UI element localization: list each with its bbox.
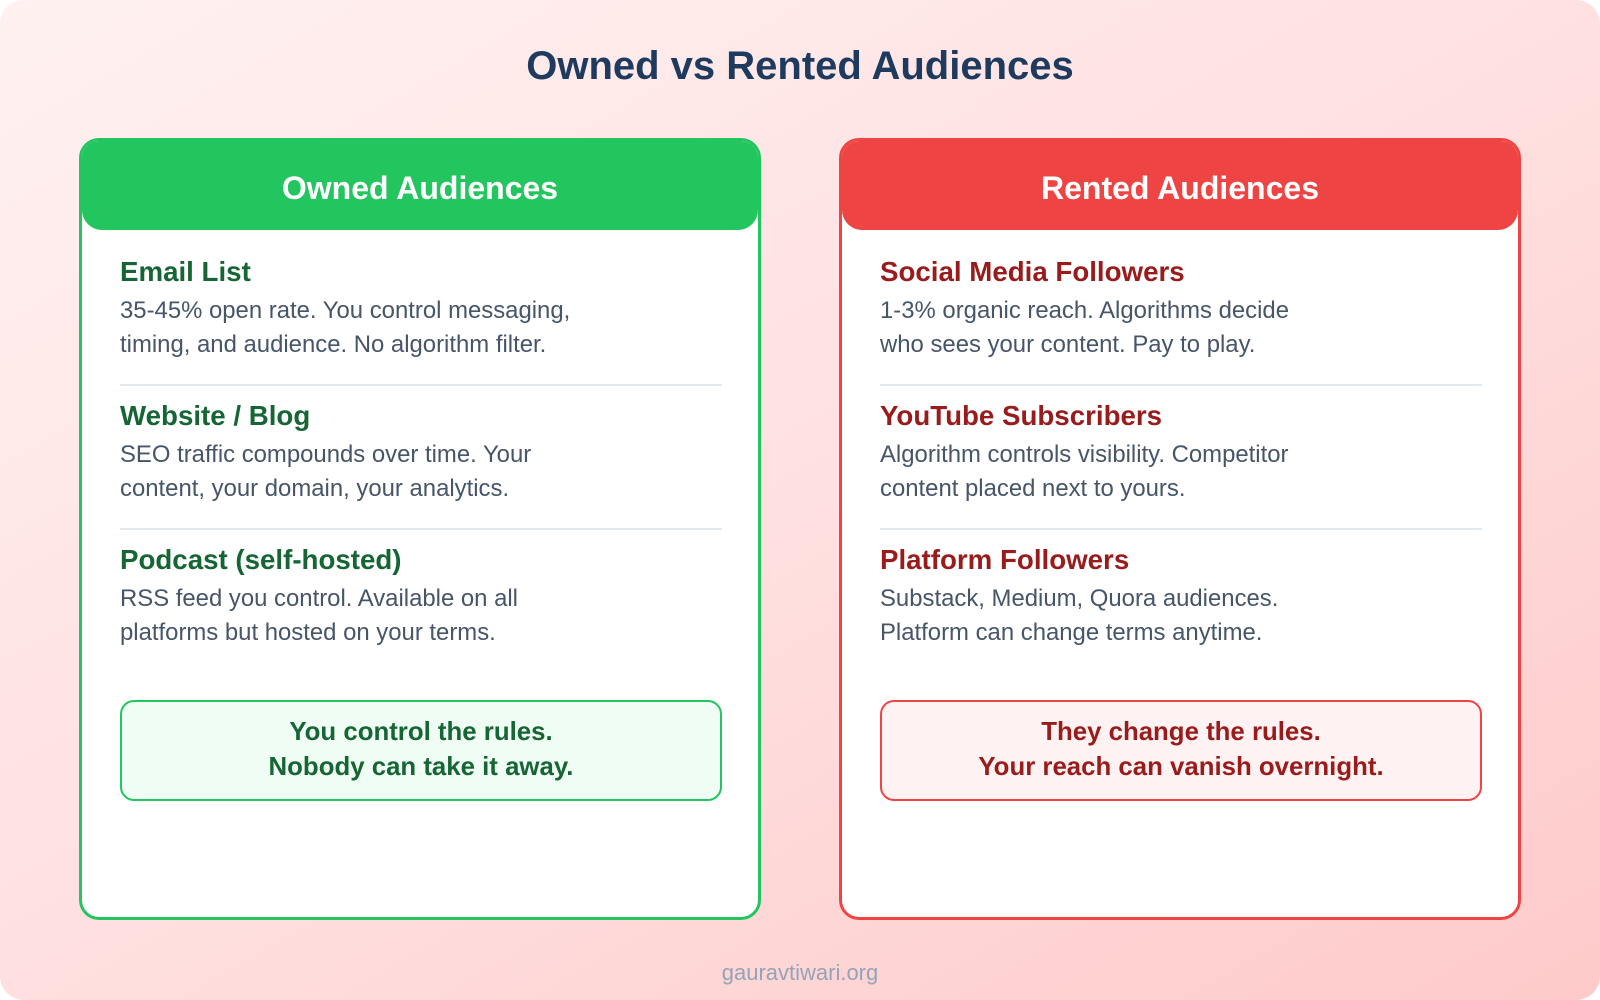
item: website [120, 400, 531, 502]
item: platform: Platform Followers [880, 544, 1129, 575]
callout: rented: They change the rules. [1041, 718, 1321, 746]
item: email list: Email List [120, 256, 251, 287]
item: podcast: RSS feed you control. Available on all [120, 585, 518, 612]
callout: rented: Your reach can vanish overnight. [978, 753, 1384, 781]
item: email list [120, 256, 570, 358]
item: platform: Platform can change terms anytime. [880, 619, 1262, 646]
item: social media: 1-3% organic reach. Algorithms decide [880, 297, 1289, 324]
callout: owned: Nobody can take it away. [269, 753, 573, 781]
item: email list: 35-45% open rate. You control messaging, [120, 297, 570, 324]
item: social media: who sees your content. Pay to play. [880, 331, 1255, 358]
item: podcast: Podcast (self-hosted) [120, 544, 402, 575]
panel: rented audiences [839, 138, 1521, 920]
item: youtube: Algorithm controls visibility. Competitor [880, 441, 1288, 468]
item: email list: timing, and audience. No algorithm filter. [120, 331, 546, 358]
item: platform: Substack, Medium, Quora audiences. [880, 585, 1278, 612]
item: podcast [120, 544, 518, 646]
item: website: Website / Blog [120, 400, 310, 431]
header: owned [82, 141, 758, 230]
item: social media [880, 256, 1289, 358]
item: website: content, your domain, your analytics. [120, 475, 509, 502]
header: owned: Owned Audiences [282, 170, 558, 206]
item: social media: Social Media Followers [880, 256, 1185, 287]
item: youtube: YouTube Subscribers [880, 400, 1162, 431]
header: rented [842, 141, 1518, 230]
header: rented: Rented Audiences [1041, 170, 1319, 206]
item: youtube [880, 400, 1288, 502]
title: Owned vs Rented Audiences [526, 44, 1074, 88]
panel: owned audiences [79, 138, 761, 920]
item: platform [880, 544, 1278, 646]
callout: owned: You control the rules. [289, 718, 553, 746]
callout: rented [880, 700, 1482, 801]
item: podcast: platforms but hosted on your terms. [120, 619, 496, 646]
item: youtube: content placed next to yours. [880, 475, 1185, 502]
item: website: SEO traffic compounds over time. Your [120, 441, 531, 468]
footer: gauravtiwari.org [722, 960, 878, 985]
callout: owned [120, 700, 722, 801]
